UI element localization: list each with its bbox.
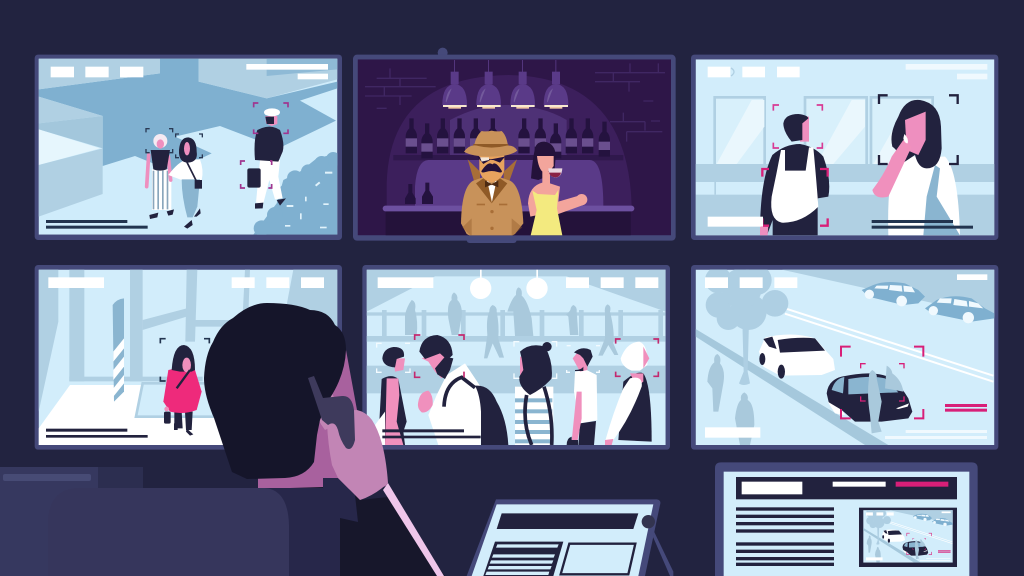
white car [759, 334, 835, 379]
person: woman in pink coat [163, 345, 202, 436]
phone [308, 376, 355, 449]
brick wall lines [365, 63, 665, 142]
interface bars [51, 64, 328, 79]
panel: shop front camera feed [691, 55, 998, 240]
bush [253, 152, 341, 236]
interface bars [705, 274, 987, 438]
black car [827, 373, 912, 422]
head [204, 303, 346, 479]
interface bars [378, 277, 658, 288]
panel: crowd camera feed [362, 265, 670, 450]
report header [736, 477, 957, 499]
detective in trench coat [461, 131, 523, 237]
ceiling lamps [470, 270, 548, 299]
desk monitor with report [715, 462, 978, 576]
person: short-haired woman [375, 347, 407, 445]
hand [327, 410, 388, 500]
ghost figures [707, 354, 903, 445]
person: woman in striped trousers [147, 134, 174, 219]
neck and face [258, 350, 388, 505]
person: bearded man with backpack [418, 335, 508, 445]
background silhouettes [405, 287, 618, 358]
person: woman in jeans [168, 137, 203, 229]
bottles [405, 118, 610, 204]
striped post [113, 298, 124, 402]
focus brackets [241, 103, 288, 188]
person: man with white backpack [760, 114, 829, 235]
tablet on desk [467, 499, 673, 576]
person: man in white tee [567, 348, 597, 445]
person: woman with bun and stripes [515, 342, 553, 445]
focus brackets [841, 347, 923, 418]
focus brackets [415, 335, 658, 377]
side desk block [0, 467, 143, 576]
chair and shoulders [48, 478, 445, 576]
panel: street camera feed [35, 55, 342, 240]
person: woman on phone [872, 100, 960, 235]
ear [310, 382, 345, 430]
person: white-haired figure in vest [605, 342, 652, 445]
person: man with hat and bag [247, 108, 286, 209]
panel: lobby camera feed [35, 265, 342, 450]
bar counter [386, 211, 631, 235]
parked cars [862, 282, 994, 322]
panel: traffic camera feed [691, 265, 998, 450]
tree [705, 265, 788, 385]
focus brackets [160, 339, 209, 381]
interface bars [48, 277, 324, 288]
interface bars [708, 67, 800, 227]
report thumbnail of traffic feed [859, 508, 957, 567]
lamps [442, 60, 568, 109]
pink status bars [945, 404, 987, 412]
woman in yellow dress [528, 142, 587, 235]
panel: bar camera feed with detective [353, 48, 676, 243]
operator at desk [0, 303, 445, 576]
report text lines [736, 507, 834, 566]
focus brackets [773, 105, 822, 148]
